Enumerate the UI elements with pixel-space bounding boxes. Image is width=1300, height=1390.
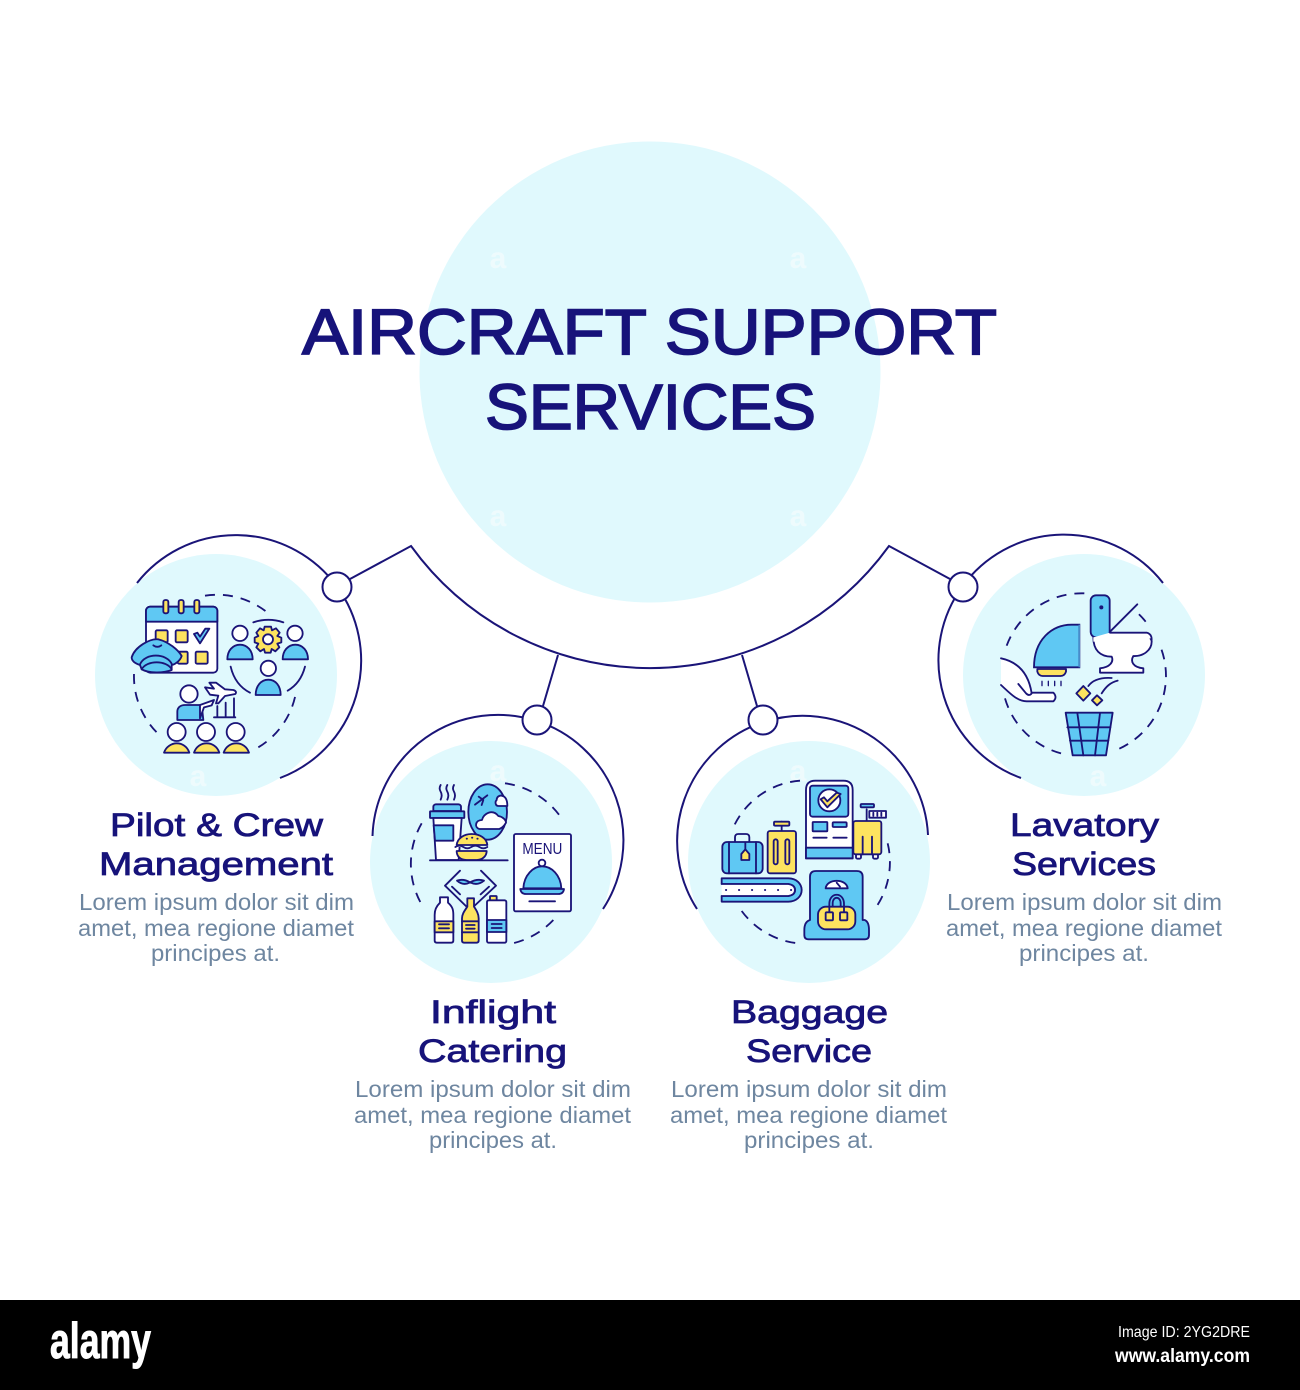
text block: inflight catering description	[354, 1076, 632, 1153]
heading: pilot and crew management: Pilot & Crew	[110, 807, 324, 843]
heading: inflight catering: Inflight	[430, 994, 556, 1030]
heading: lavatory services: Services	[1012, 846, 1156, 882]
icon: pilot and crew management	[132, 595, 308, 753]
title	[302, 296, 997, 443]
stock watermark marks: a	[490, 242, 507, 275]
text block: inflight catering description: principes at.	[429, 1127, 557, 1153]
text block: lavatory services description: amet, mea regione diamet	[946, 915, 1223, 941]
heading: lavatory services	[1010, 807, 1159, 882]
heading: baggage service: Baggage	[731, 994, 888, 1030]
heading: baggage service	[731, 994, 888, 1069]
title: AIRCRAFT SUPPORT	[302, 296, 997, 368]
text block: baggage service description	[670, 1076, 948, 1153]
footer image id: Image ID: 2YG2DRE	[1118, 1324, 1250, 1341]
title: SERVICES	[485, 371, 816, 443]
icon: inflight catering	[411, 783, 571, 943]
icon: lavatory services	[1001, 593, 1166, 755]
connector node: pilot	[322, 572, 352, 602]
text block: pilot and crew description	[78, 889, 355, 966]
text block: baggage service description: Lorem ipsum dolor sit dim	[671, 1076, 947, 1102]
text block: lavatory services description: principes at.	[1019, 940, 1149, 966]
footer url: www.alamy.com	[1114, 1346, 1250, 1367]
stock watermark marks: a	[490, 500, 507, 533]
stock watermark marks: a	[790, 755, 807, 788]
pale circle: pilot and crew	[95, 554, 337, 796]
heading: baggage service: Service	[746, 1033, 872, 1069]
stock watermark marks: a	[790, 500, 807, 533]
text block: pilot and crew description: amet, mea regione diamet	[78, 915, 355, 941]
pale circle: lavatory services	[963, 554, 1205, 796]
central circle	[420, 142, 880, 602]
icon: baggage service	[722, 781, 890, 943]
connector node: catering	[522, 706, 552, 734]
pale circle: baggage service	[688, 741, 930, 983]
connector network	[137, 535, 1163, 909]
text block: baggage service description: principes at.	[744, 1127, 874, 1153]
text block: baggage service description: amet, mea regione diamet	[670, 1102, 948, 1128]
stock watermark marks: a	[490, 755, 507, 788]
text block: pilot and crew description: Lorem ipsum dolor sit dim	[79, 889, 354, 915]
text block: lavatory services description: Lorem ipsum dolor sit dim	[947, 889, 1222, 915]
heading: lavatory services: Lavatory	[1010, 807, 1159, 843]
footer bar	[0, 1300, 1300, 1390]
heading: pilot and crew management	[99, 807, 333, 882]
connector node: lavatory	[948, 572, 978, 602]
icon: inflight catering: MENU	[522, 841, 562, 858]
connector node: baggage	[748, 706, 778, 734]
stock watermark marks: a	[790, 242, 807, 275]
text block: inflight catering description: Lorem ipsum dolor sit dim	[355, 1076, 631, 1102]
heading: inflight catering	[418, 994, 567, 1069]
heading: pilot and crew management: Management	[99, 846, 333, 882]
footer logo: alamy	[50, 1313, 151, 1369]
text block: lavatory services description	[946, 889, 1223, 966]
text block: inflight catering description: amet, mea regione diamet	[354, 1102, 632, 1128]
pale circle: inflight catering	[370, 741, 612, 983]
stock watermark marks: a	[1090, 760, 1107, 793]
text block: pilot and crew description: principes at.	[151, 940, 280, 966]
stock watermark marks: a	[190, 760, 207, 793]
stock watermark marks	[190, 242, 1107, 793]
heading: inflight catering: Catering	[418, 1033, 567, 1069]
